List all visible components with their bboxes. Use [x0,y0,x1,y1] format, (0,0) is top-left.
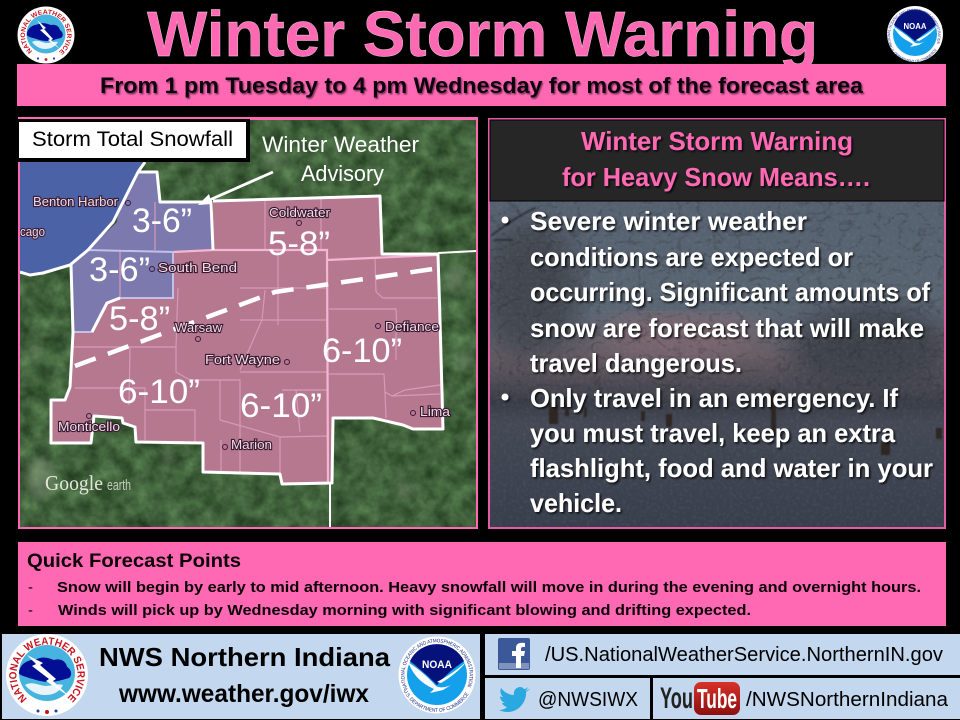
icon: twitter [499,687,530,712]
city labels [20,194,451,452]
icon: NWS logo large: NATIONAL WEATHER SERVICE [9,637,85,704]
advisory label: Winter Weather [262,132,419,157]
time banner [17,64,946,106]
bullet: severe conditions: conditions are expected or [530,242,853,272]
city labels: Warsaw [175,320,223,335]
icon: NOAA logo large [398,636,476,714]
bullet: emergency travel: flashlight, food and water in your [530,453,933,483]
panel heading: for Heavy Snow Means…. [562,162,870,192]
city labels: South Bend [158,260,237,275]
panel frame [488,118,946,529]
google earth mark: Google [45,471,103,495]
quick forecast heading: Quick Forecast Points [27,551,241,572]
icon: NOAA logo large: U.S. DEPARTMENT OF COMMERCE [404,689,469,712]
forecast point one: - [28,579,33,596]
forecast point two: Winds will pick up by Wednesday morning with significant blowing and drifting expected. [58,602,751,619]
satellite terrain [20,120,476,527]
google earth mark [46,475,130,494]
icon: facebook [498,638,530,670]
panel: quick forecast points [18,542,946,626]
snowfall amounts: 3-6” [132,202,192,240]
map frame [18,117,478,529]
snowfall amounts: 5-8” [109,300,170,338]
winter weather advisory area [71,172,213,332]
arrow to advisory area [198,172,273,205]
footer: youtube link [653,678,960,719]
panel: what a warning means [480,118,950,529]
forecast point two: - [28,602,33,619]
snowfall amounts: 3-6” [89,251,150,289]
city labels: Fort Wayne [205,352,280,367]
bullet: emergency travel: Only travel in an emergency. If [530,383,898,413]
winter storm warning area [51,196,443,484]
office name: NWS Northern Indiana [99,642,391,672]
footer: facebook link [485,634,960,675]
lake [20,162,142,274]
bullet: severe conditions [502,206,930,378]
footer: twitter link: @NWSIWX [538,689,638,711]
icon: NOAA logo small: NOAA [904,22,927,31]
snowfall amounts: 6-10” [322,332,402,370]
icon: youtube [660,682,740,715]
map title label: Storm Total Snowfall [32,128,233,151]
city labels: cago [20,224,45,239]
bullet: emergency travel: vehicle. [530,488,622,518]
footer: twitter link [485,678,650,719]
footer: youtube link: /NWSNorthernIndiana [746,689,949,711]
panel: snowfall map [15,117,478,529]
bullet: emergency travel [502,383,933,518]
icon: NOAA logo large: NATIONAL OCEANIC AND ATMOSPHERIC ADMINISTRATION [400,638,474,690]
dashed line between snow amounts [75,268,440,366]
icon: NOAA logo small [887,6,943,62]
footer: NWS contact [2,634,480,719]
footer: facebook link: /US.NationalWeatherService.NorthernIN.gov [545,644,943,666]
advisory label [262,132,419,186]
winter scene backdrop [480,200,950,528]
panel heading [490,120,944,201]
region boundaries pale [173,250,437,483]
icon: NWS logo small: NATIONAL WEATHER SERVICE [20,10,72,55]
bullet: emergency travel: you must travel, keep an extra [530,418,896,448]
map title label [15,119,250,162]
city labels: Monticello [58,419,120,434]
advisory label: Advisory [301,161,384,186]
snowfall amounts [89,202,402,425]
icon: NOAA logo large: NOAA [422,659,452,671]
snowfall amounts: 5-8” [268,225,330,263]
icon: NOAA logo small: U.S. DEPARTMENT OF COMMERCE [890,46,937,62]
title: Winter Storm Warning [147,0,818,70]
google earth mark: earth [107,477,131,494]
terrain town patches [26,153,473,500]
city labels: Lima [420,404,451,419]
white outlines [20,162,476,527]
icon: youtube: Tube [697,683,737,714]
bullet: severe conditions: snow are forecast that will make [530,313,924,343]
city labels: Benton Harbor [33,194,119,209]
snowfall amounts: 6-10” [118,373,200,411]
bullet: severe conditions: travel dangerous. [530,348,742,378]
time banner: From 1 pm Tuesday to 4 pm Wednesday for most of the forecast area [100,73,864,98]
city labels: Defiance [385,319,439,334]
icon: youtube: You [660,682,693,715]
snowfall amounts: 6-10” [240,387,322,425]
bullet: severe conditions: occurring. Significant amounts of [530,277,930,307]
forecast point one: Snow will begin by early to mid afternoon. Heavy snowfall will move in during the evening and overnight hours. [57,579,921,596]
county lines [73,199,440,474]
city labels: Marion [231,437,272,452]
office website: www.weather.gov/iwx [118,680,369,708]
icon: NOAA logo small: NATIONAL OCEANIC AND ATMOSPHERIC ADMINISTRATION [887,8,941,46]
bullet: severe conditions: Severe winter weather [530,206,807,236]
city labels: Coldwater [269,205,331,220]
panel heading: Winter Storm Warning [581,126,853,156]
